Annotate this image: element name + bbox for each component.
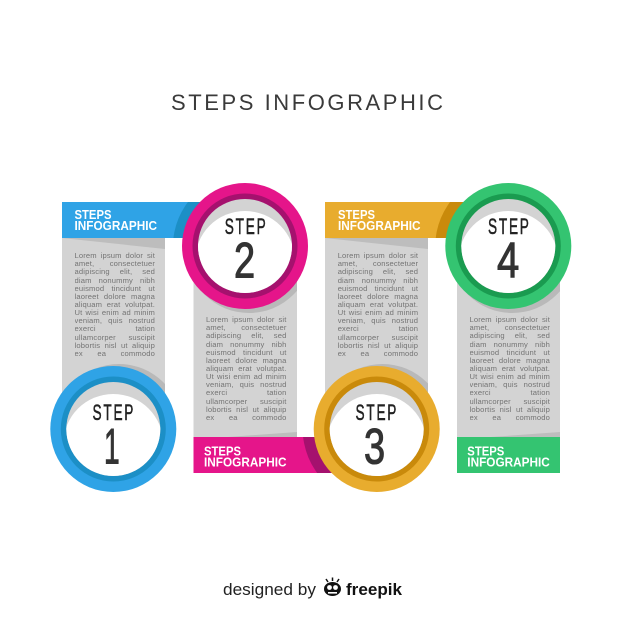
- text block: step 1: exerci tation: [74, 324, 155, 333]
- text block: step 4: lobortis nisl ut aliquip: [470, 405, 550, 414]
- text block: step 1: adipiscing elit, sed: [74, 267, 155, 276]
- text block: step 4: exerci tation: [470, 388, 550, 397]
- text block: step 4: euismod tincidunt ut: [470, 348, 550, 357]
- text block: step 2: aliquam erat volutpat.: [206, 364, 286, 373]
- circle: step 1: STEP: [92, 400, 133, 425]
- text block: step 4: laoreet dolore magna: [470, 356, 550, 365]
- text block: step 2: ullamcorper suscipit: [206, 397, 286, 406]
- text block: step 1: ullamcorper suscipit: [74, 333, 155, 342]
- text block: step 2: exerci tation: [206, 388, 286, 397]
- text block: step 4: veniam, quis nostrud: [470, 380, 550, 389]
- text block: step 4: adipiscing elit, sed: [470, 331, 550, 340]
- text block: step 4: Ut wisi enim ad minim: [470, 372, 550, 381]
- text block: step 3: ex ea commodo: [338, 349, 418, 358]
- footer credit: freepik: [346, 580, 403, 599]
- text block: step 3: euismod tincidunt ut: [338, 284, 418, 293]
- circle: step 1: 1: [104, 418, 120, 474]
- header: step 1: STEPS: [74, 208, 112, 222]
- text block: step 3: veniam, quis nostrud: [338, 316, 418, 325]
- circle: step 3: [314, 366, 440, 494]
- header: step 3: [325, 202, 464, 238]
- text block: step 1: diam nonummy nibh: [74, 276, 155, 285]
- title: STEPS INFOGRAPHIC: [171, 90, 443, 115]
- text block: step 2: [206, 316, 286, 423]
- circle: step 3: 3: [364, 419, 385, 475]
- text block: step 3: exerci tation: [338, 324, 418, 333]
- circle: step 3: STEP: [356, 400, 396, 425]
- icon: freepik mascot: [324, 578, 341, 596]
- text block: step 2: lobortis nisl ut aliquip: [206, 405, 286, 414]
- text block: step 2: euismod tincidunt ut: [206, 348, 286, 357]
- header: step 1: INFOGRAPHIC: [74, 219, 157, 233]
- text block: step 1: amet, consectetuer: [74, 259, 155, 268]
- header: step 1: [62, 202, 200, 238]
- panel: step 4: [457, 282, 560, 473]
- panel: step 2: [194, 282, 332, 473]
- circle: step 2: STEP: [225, 214, 266, 239]
- text block: step 2: veniam, quis nostrud: [206, 380, 286, 389]
- text block: step 4: diam nonummy nibh: [470, 340, 550, 349]
- header: step 2: STEPS: [204, 445, 241, 459]
- text block: step 3: [338, 252, 418, 359]
- circle: step 2: 2: [234, 233, 255, 289]
- text block: step 2: Ut wisi enim ad minim: [206, 372, 286, 381]
- text block: step 1: ex ea commodo: [74, 349, 155, 358]
- text block: step 4: ex ea commodo: [470, 413, 550, 422]
- header: step 4: STEPS: [467, 445, 504, 459]
- text block: step 1: veniam, quis nostrud: [74, 316, 155, 325]
- header: step 4: [457, 437, 560, 473]
- circle: step 2: [182, 183, 308, 311]
- text block: step 3: adipiscing elit, sed: [338, 267, 418, 276]
- text block: step 4: ullamcorper suscipit: [470, 397, 550, 406]
- text block: step 3: ullamcorper suscipit: [338, 333, 418, 342]
- text block: step 1: [74, 252, 155, 359]
- text block: step 4: amet, consectetuer: [470, 323, 550, 332]
- text block: step 1: aliquam erat volutpat.: [74, 300, 155, 309]
- circle: step 4: 4: [497, 232, 519, 288]
- text block: step 3: Ut wisi enim ad minim: [338, 308, 418, 317]
- panel: step 1: [62, 202, 200, 393]
- header: step 2: [194, 437, 332, 473]
- text block: step 3: amet, consectetuer: [338, 259, 418, 268]
- text block: step 3: lobortis nisl ut aliquip: [338, 341, 418, 350]
- text block: step 2: amet, consectetuer: [206, 323, 286, 332]
- text block: step 2: ex ea commodo: [206, 413, 286, 422]
- text block: step 4: [470, 316, 550, 423]
- text block: step 3: diam nonummy nibh: [338, 276, 418, 285]
- header: step 4: INFOGRAPHIC: [467, 456, 550, 470]
- header: step 2: INFOGRAPHIC: [204, 456, 286, 470]
- text block: step 3: laoreet dolore magna: [338, 292, 418, 301]
- header: step 3: STEPS: [338, 208, 375, 222]
- circle: step 4: STEP: [488, 214, 529, 239]
- circle: step 1: [50, 366, 176, 494]
- text block: step 2: diam nonummy nibh: [206, 340, 286, 349]
- text block: step 3: aliquam erat volutpat.: [338, 300, 418, 309]
- text block: step 4: aliquam erat volutpat.: [470, 364, 550, 373]
- text block: step 1: Ut wisi enim ad minim: [74, 308, 155, 317]
- text block: step 1: laoreet dolore magna: [74, 292, 155, 301]
- text block: step 1: euismod tincidunt ut: [74, 284, 155, 293]
- text block: step 2: laoreet dolore magna: [206, 356, 286, 365]
- text block: step 1: lobortis nisl ut aliquip: [74, 341, 155, 350]
- panel: step 3: [325, 202, 464, 393]
- footer credit: [223, 578, 403, 599]
- footer credit: designed by: [223, 581, 317, 599]
- circle: step 4: [445, 183, 571, 311]
- header: step 3: INFOGRAPHIC: [338, 219, 420, 233]
- text block: step 2: adipiscing elit, sed: [206, 331, 286, 340]
